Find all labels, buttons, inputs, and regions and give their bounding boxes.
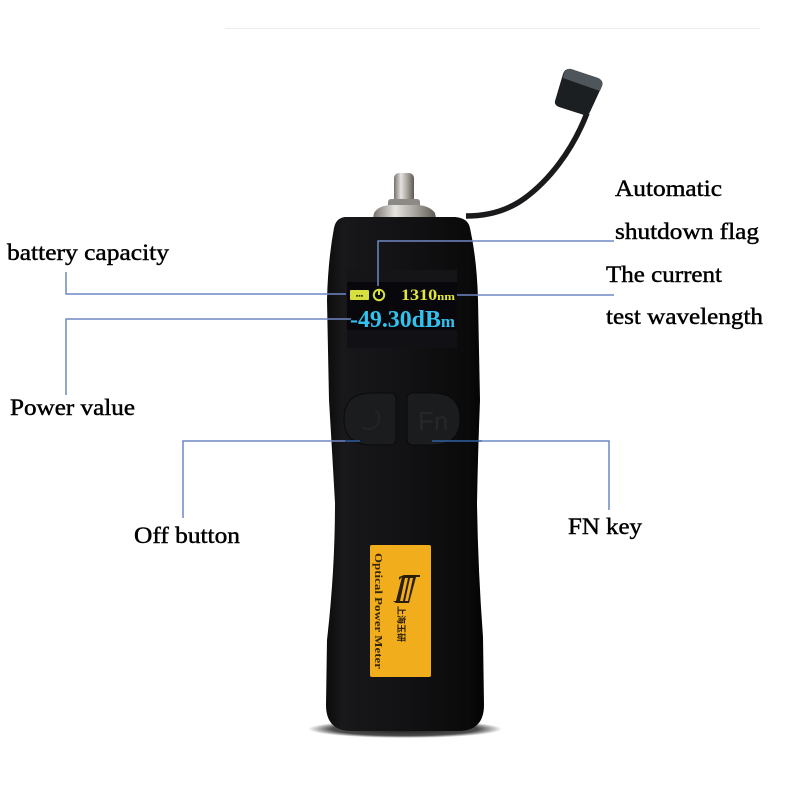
callout: FN key [432, 441, 643, 539]
brand logo [393, 575, 420, 603]
auto shutdown icon [374, 289, 384, 300]
callout: automatic shutdown flag: shutdown flag [615, 219, 760, 244]
FN button: Fn [418, 406, 448, 436]
callout: battery capacity [7, 240, 346, 294]
device: optical power meter [308, 69, 602, 738]
callout: current test wavelength [457, 262, 764, 329]
display screen [347, 270, 457, 348]
callout: off button: Off button [134, 523, 241, 548]
FN button [407, 393, 460, 445]
callout: power value: Power value [10, 395, 135, 420]
fibre connector [373, 173, 436, 218]
label text: Optical Power Meter [372, 553, 384, 669]
dust cap [555, 69, 602, 115]
brand name: 上海玉研 [396, 606, 407, 642]
callout: current test wavelength: The current [606, 262, 723, 287]
top divider line [225, 28, 760, 30]
callout: current test wavelength: test wavelength [606, 304, 764, 329]
meter body [326, 217, 484, 731]
callout: power value [10, 319, 351, 420]
callout: battery capacity: battery capacity [7, 240, 170, 265]
callout: off button [134, 441, 360, 548]
off button [344, 393, 396, 445]
callout: automatic shutdown flag: Automatic [615, 176, 722, 201]
callout: automatic shutdown flag [378, 176, 760, 286]
battery icon: ▪▪▪ [356, 293, 364, 300]
ground shadow [308, 720, 502, 738]
product label [370, 545, 431, 677]
callout: FN key: FN key [568, 514, 643, 539]
power reading: -49.30dBm [350, 307, 455, 333]
dust cap tether [466, 113, 587, 216]
wavelength reading: 1310 nm [401, 287, 455, 304]
